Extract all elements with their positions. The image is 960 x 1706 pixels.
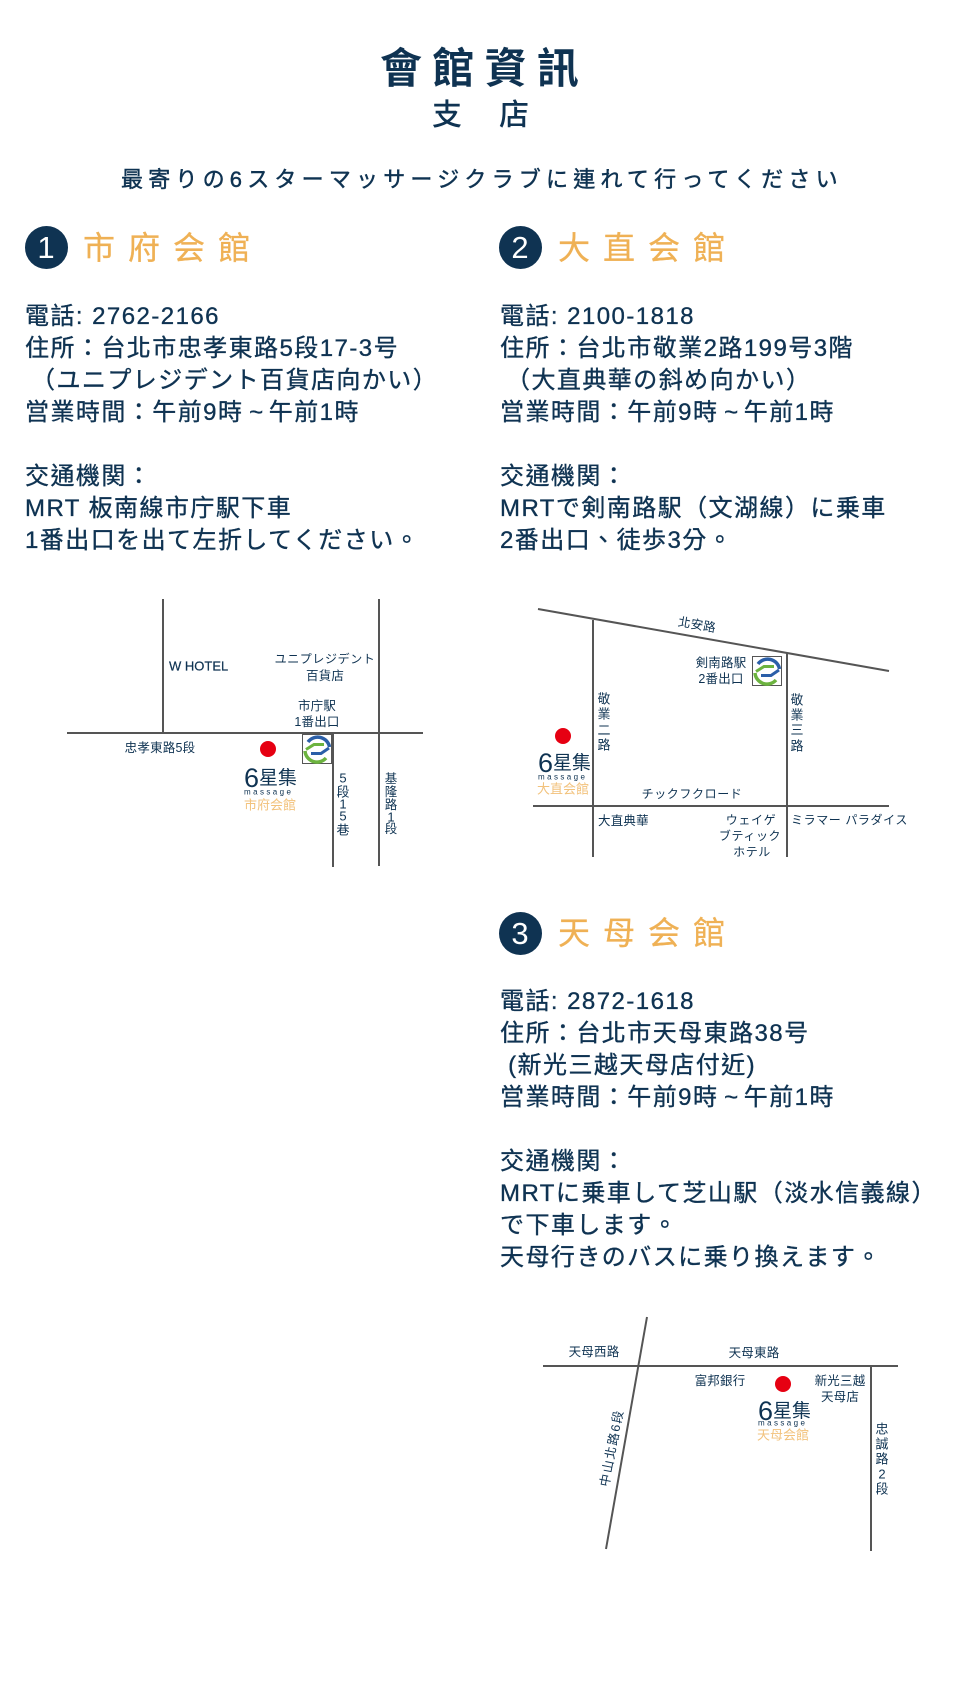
road label: 敬業三路: 敬 — [790, 692, 804, 708]
logo: 6 star massage — [244, 763, 297, 812]
branch 1 info text: 交通機関： — [25, 463, 152, 490]
branch 3 info text: で下車します。 — [500, 1212, 678, 1239]
road label: 敬業三路: 業 — [790, 708, 804, 722]
location dot — [555, 728, 571, 744]
branch 2 info text: 電話: 2100-1818 — [500, 303, 695, 330]
road label: 忠誠路2段: 誠 — [875, 1436, 889, 1452]
map: branch 2: 2番出口 — [698, 672, 744, 686]
road label: 5段15巷: 1 — [339, 796, 347, 812]
road label: 基隆路1段: 基 — [385, 772, 398, 786]
heading: branch 2: 大直会館 — [558, 230, 738, 266]
map: branch 1: 百貨店 — [306, 669, 344, 683]
logo: 6 star massage: 市府会館 — [244, 798, 296, 812]
logo: 6 star massage: massage — [244, 788, 293, 796]
heading: branch 3: 天母会館 — [558, 915, 738, 951]
branch 3 info text: 営業時間：午前9時 ~ 午前1時 — [500, 1084, 835, 1111]
map: branch 2: チックフクロード — [642, 787, 742, 801]
map: branch 3: 天母東路 — [729, 1345, 780, 1360]
map: branch 1: W HOTEL — [169, 658, 228, 674]
branch 3 info text: 交通機関： — [500, 1148, 627, 1175]
branch 3 info text: 天母行きのバスに乗り換えます。 — [500, 1244, 882, 1271]
road label: 敬業三路: 路 — [790, 738, 804, 754]
branch 1 info text: （ユニプレジデント百貨店向かい） — [31, 367, 438, 394]
panel: branch 2 — [499, 226, 908, 859]
branch 1 info text: 1番出口を出て左折してください。 — [25, 527, 420, 554]
branch 2 info text — [500, 303, 887, 554]
map: branch 2: 剣南路駅 — [696, 655, 747, 670]
map: branch 1: 市庁駅 — [298, 698, 336, 713]
road label: 忠誠路2段: 忠 — [875, 1422, 889, 1436]
branch 3 info text: (新光三越天母店付近) — [508, 1052, 756, 1079]
road label: 敬業二路: 路 — [597, 738, 611, 752]
number badge 1: 1 — [37, 230, 55, 264]
road label: 敬業二路: 二 — [597, 722, 611, 738]
icon: MRT logo — [302, 734, 332, 764]
branch 2 info text: 交通機関： — [500, 463, 627, 490]
branch 2 info text: MRTで剣南路駅（文湖線）に乗車 — [500, 495, 887, 522]
map: branch 2: ホテル — [733, 845, 771, 859]
road label: 5段15巷: 巷 — [336, 822, 350, 838]
road label: 敬業二路: 業 — [597, 706, 611, 722]
intro text: 最寄りの6スターマッサージクラブに連れて行ってください — [121, 167, 843, 192]
map: branch 1: ユニプレジデント — [275, 651, 375, 666]
map: branch 2: 大直典華 — [598, 814, 649, 828]
number badge 3 — [498, 912, 542, 955]
logo: 6 star massage: 6星集 — [538, 748, 591, 778]
logo: 6 star massage: 6星集 — [244, 763, 297, 793]
branch 1 info text: MRT 板南線市庁駅下車 — [25, 495, 292, 522]
road label: 5段15巷 — [336, 770, 350, 838]
map: branch 2: 北安路 — [677, 614, 717, 635]
road label: 敬業二路: 敬 — [597, 692, 611, 706]
map: branch 3 — [543, 1316, 898, 1551]
branch 1 info text — [25, 303, 438, 554]
map: branch 1 — [67, 599, 423, 867]
road label: 基隆路1段: 隆 — [385, 784, 398, 799]
road label: 基隆路1段: 段 — [385, 821, 397, 836]
logo: 6 star massage: 6星集 — [758, 1396, 811, 1426]
icon: MRT logo — [752, 656, 782, 686]
road label: 敬業三路: 三 — [790, 722, 804, 738]
branch 1 info text: 営業時間：午前9時 ~ 午前1時 — [25, 399, 360, 426]
map: branch 2: ウェイゲ — [726, 813, 776, 827]
panel: branch 1 — [25, 226, 438, 867]
road label: 忠誠路2段 — [875, 1422, 889, 1496]
map: branch 2: ブティック — [719, 828, 781, 843]
branch 1 info text: 電話: 2762-2166 — [25, 303, 220, 330]
road label: 5段15巷: 5 — [339, 808, 347, 824]
logo: 6 star massage: massage — [538, 772, 587, 782]
road label: 中山北路6段: 中山北路6段 — [597, 1408, 626, 1488]
road label: 忠誠路2段: 路 — [875, 1452, 889, 1466]
road label: 敬業三路 — [790, 692, 804, 754]
branch 2 info text: 住所：台北市敬業2路199号3階 — [500, 335, 854, 362]
branch 2 info text: （大直典華の斜め向かい） — [506, 367, 811, 394]
road label: 基隆路1段: 1 — [387, 810, 395, 824]
road label: 5段15巷: 段 — [336, 784, 350, 800]
logo: 6 star massage — [537, 748, 591, 796]
map: branch 1: 忠孝東路5段 — [125, 740, 195, 755]
road label: 基隆路1段 — [385, 772, 398, 836]
panel: branch 3 — [499, 912, 937, 1551]
logo: 6 star massage — [757, 1396, 811, 1442]
logo: 6 star massage: 天母会館 — [757, 1428, 809, 1442]
heading: branch 1: 市府会館 — [83, 230, 263, 266]
map: branch 3: 天母西路 — [569, 1344, 620, 1359]
branch 3 info text: 電話: 2872-1618 — [500, 988, 695, 1015]
map: branch 3: 天母店 — [821, 1390, 859, 1404]
map: branch 2 — [533, 608, 908, 859]
title: 會館資訊 — [380, 45, 589, 92]
branch 2 info text: 営業時間：午前9時 ~ 午前1時 — [500, 399, 835, 426]
road label: 忠誠路2段: 2 — [878, 1466, 886, 1482]
road label: 忠誠路2段: 段 — [875, 1482, 889, 1496]
number badge 2: 2 — [511, 230, 529, 264]
map: branch 2: ミラマー パラダイス — [791, 812, 908, 827]
branch 3 info text — [500, 988, 937, 1271]
branch 1 info text: 住所：台北市忠孝東路5段17-3号 — [25, 335, 399, 362]
branch 2 info text: 2番出口、徒歩3分。 — [500, 527, 733, 554]
number badge 1 — [24, 226, 68, 268]
road label: 5段15巷: 5 — [339, 770, 347, 786]
logo: 6 star massage: massage — [758, 1418, 807, 1428]
branch 3 info text: MRTに乗車して芝山駅（淡水信義線） — [500, 1180, 937, 1207]
branch 3 info text: 住所：台北市天母東路38号 — [500, 1020, 810, 1047]
location dot — [775, 1376, 791, 1392]
location dot — [260, 741, 276, 757]
number badge 3: 3 — [511, 916, 529, 951]
road label: 基隆路1段: 路 — [385, 797, 398, 812]
number badge 2 — [498, 226, 542, 268]
map: branch 3: 富邦銀行 — [695, 1373, 745, 1388]
logo: 6 star massage: 大直会館 — [537, 782, 589, 796]
subtitle: 支店 — [432, 99, 566, 132]
map: branch 1: 1番出口 — [294, 715, 340, 729]
road label: 敬業二路 — [597, 692, 611, 752]
map: branch 3: 新光三越 — [815, 1373, 866, 1388]
